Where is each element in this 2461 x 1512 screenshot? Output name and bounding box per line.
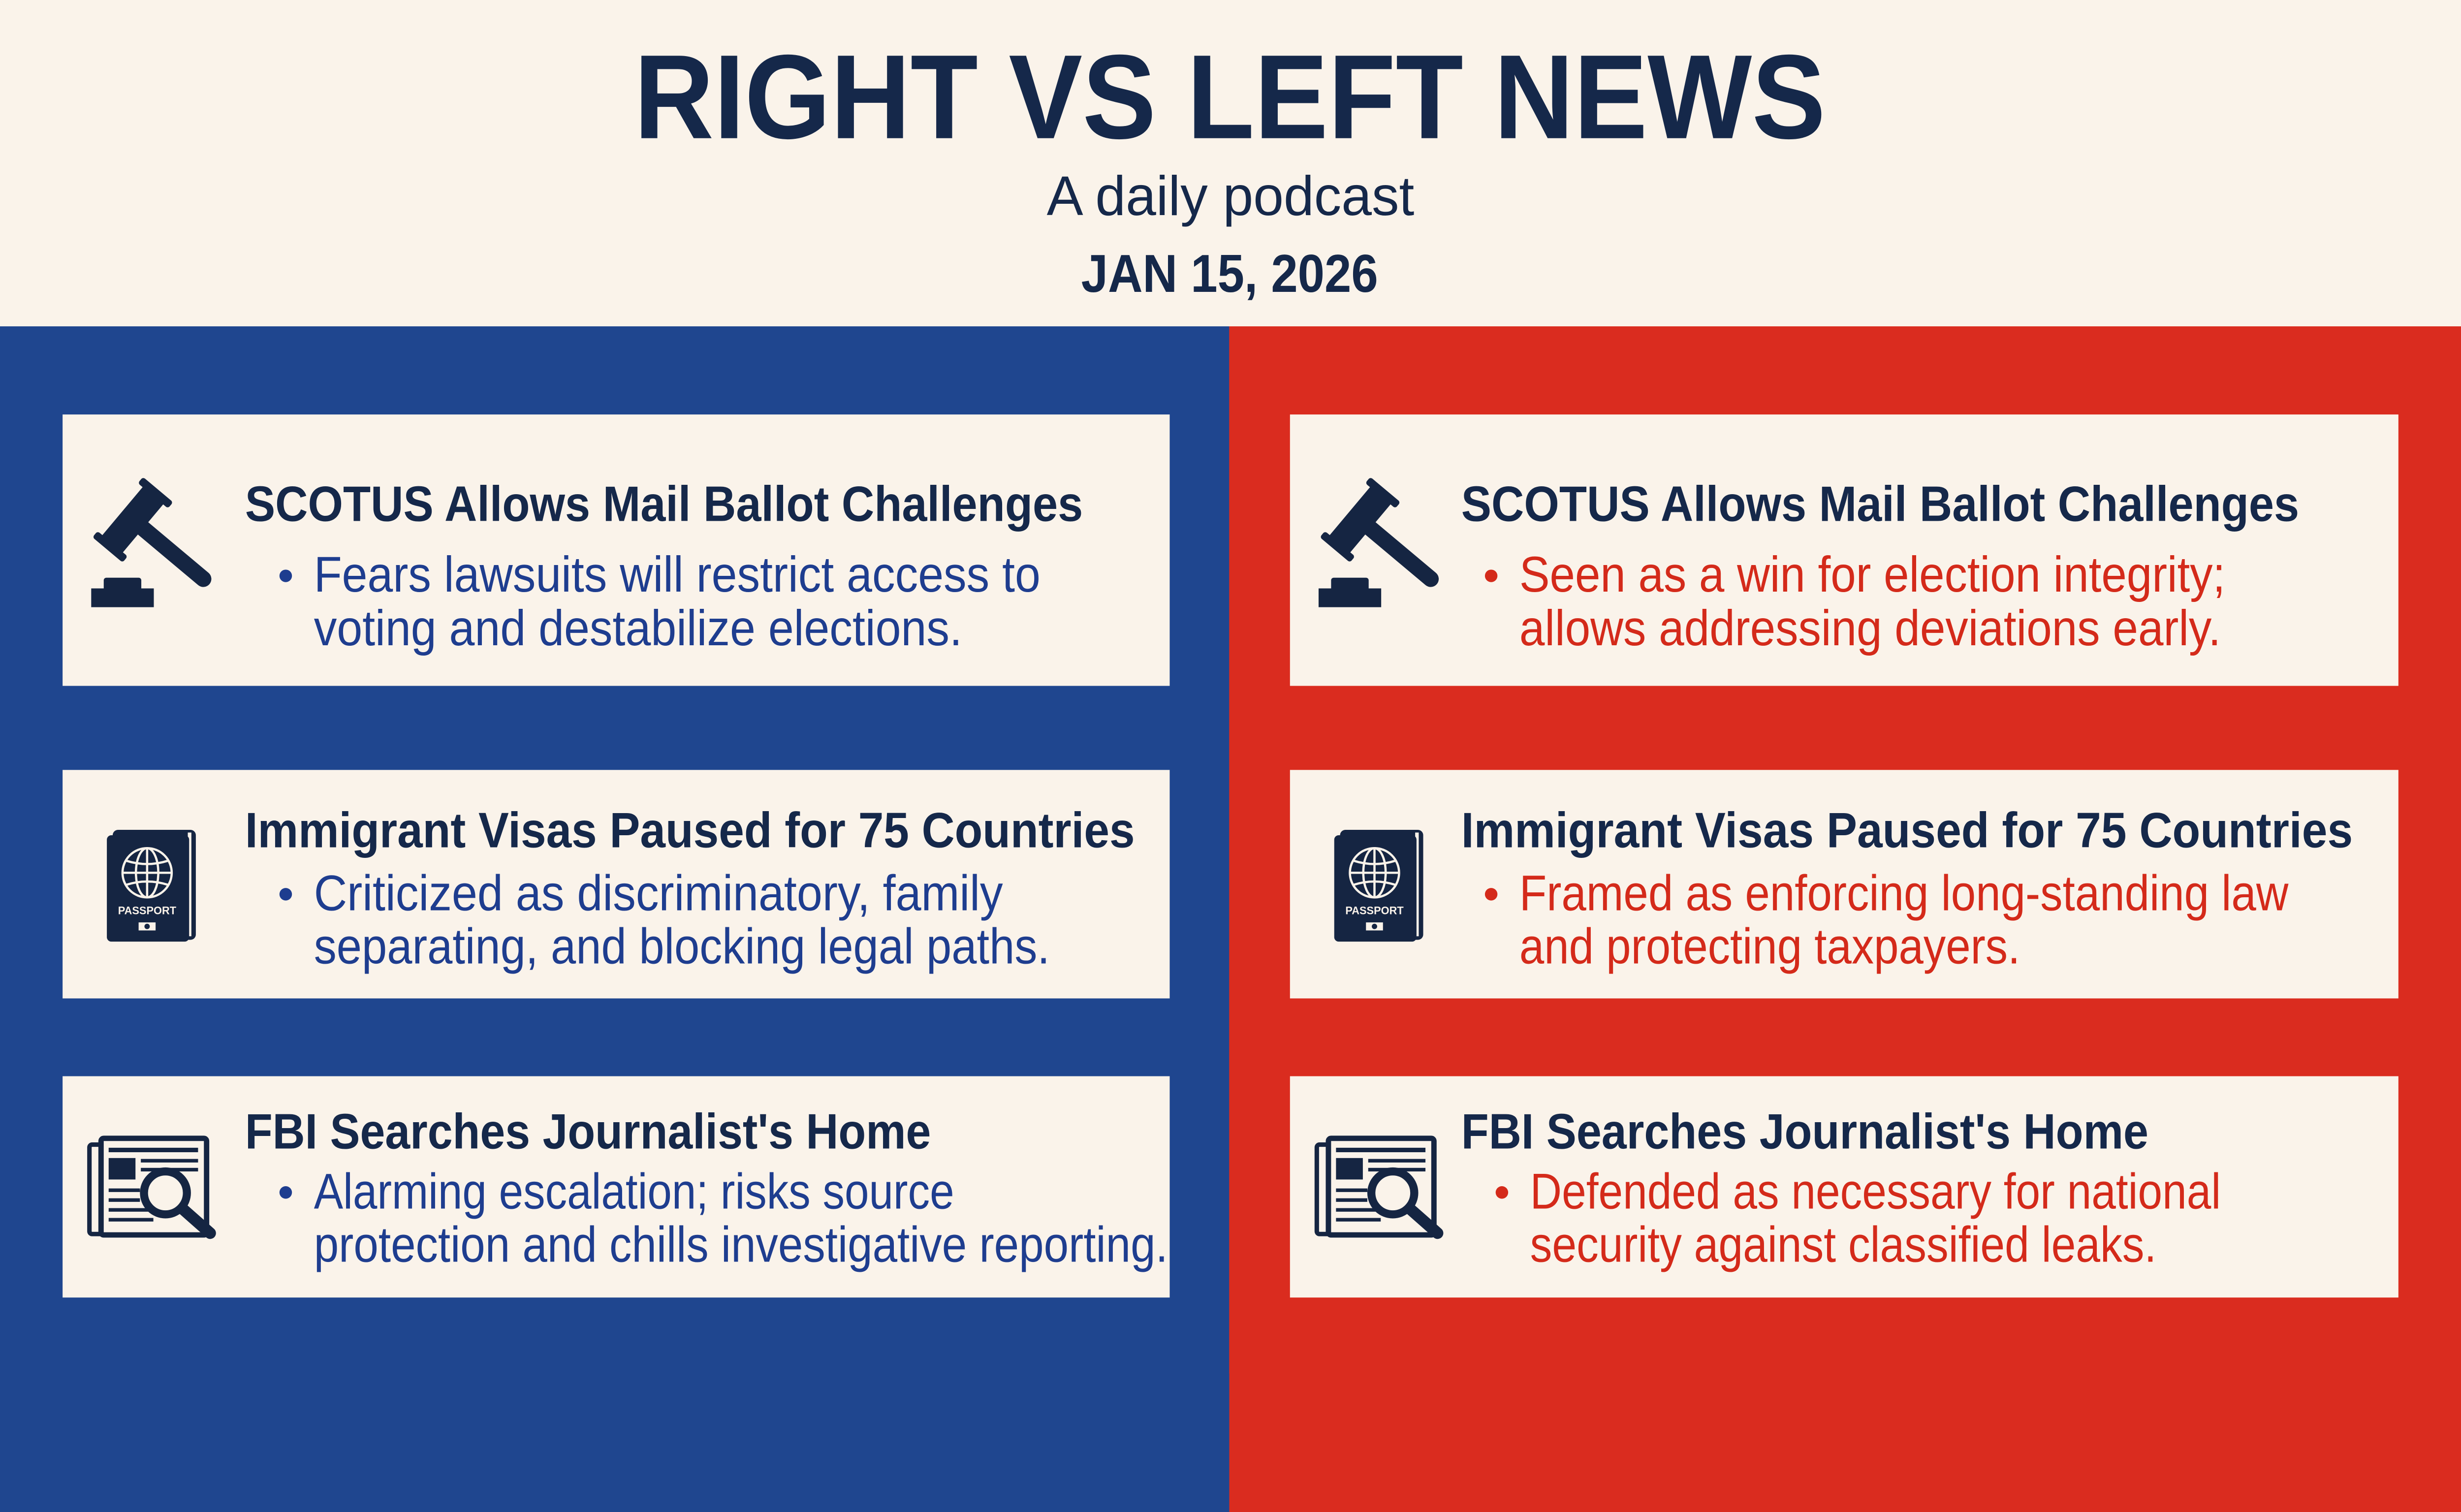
card: left FBI: Alarming escalation; risks source bbox=[314, 1163, 954, 1219]
card: left visas: Immigrant Visas Paused for 75 Countries bbox=[245, 803, 1135, 858]
icon: newspaper magnifier bbox=[90, 1138, 210, 1235]
card: left FBI: protection and chills investigative reporting. bbox=[314, 1217, 1168, 1273]
icon: gavel right bbox=[1319, 477, 1462, 614]
card: right visas: and protecting taxpayers. bbox=[1519, 918, 2020, 975]
card: right FBI: security against classified leaks. bbox=[1530, 1217, 2156, 1273]
card: right FBI bbox=[1290, 1076, 2398, 1297]
card: right SCOTUS bbox=[1290, 414, 2398, 686]
card: right visas: Framed as enforcing long-standing law bbox=[1519, 865, 2289, 921]
icon: newspaper magnifier right bbox=[1317, 1138, 1438, 1235]
icon: gavel bbox=[91, 477, 235, 614]
card: left FBI: FBI Searches Journalist's Home bbox=[245, 1104, 931, 1160]
card: right SCOTUS: allows addressing deviations early. bbox=[1519, 600, 2221, 656]
card: left SCOTUS: voting and destabilize elections. bbox=[314, 600, 962, 656]
card: right SCOTUS: Seen as a win for election integrity; bbox=[1519, 546, 2225, 602]
card: right visas: Immigrant Visas Paused for 75 Countries bbox=[1461, 803, 2353, 858]
icon: passport right bbox=[1334, 830, 1423, 942]
card: left SCOTUS: SCOTUS Allows Mail Ballot Challenges bbox=[245, 476, 1083, 532]
date: JAN 15, 2026 bbox=[1081, 244, 1378, 304]
header background bbox=[0, 0, 2461, 326]
card: left SCOTUS: Fears lawsuits will restrict access to bbox=[314, 546, 1041, 602]
title: RIGHT VS LEFT NEWS bbox=[634, 30, 1826, 164]
subtitle: A daily podcast bbox=[1047, 165, 1414, 227]
icon: passport bbox=[107, 830, 196, 942]
card: right FBI: Defended as necessary for national bbox=[1530, 1163, 2221, 1219]
card: left visas: Criticized as discriminatory, family bbox=[314, 865, 1003, 921]
card: right FBI: FBI Searches Journalist's Home bbox=[1461, 1104, 2148, 1160]
card: left SCOTUS bbox=[63, 414, 1169, 686]
card: left visas bbox=[63, 770, 1169, 999]
card: right SCOTUS: SCOTUS Allows Mail Ballot Challenges bbox=[1461, 476, 2299, 532]
panel: left (blue) bbox=[0, 326, 1229, 1374]
card: left visas: separating, and blocking legal paths. bbox=[314, 918, 1050, 975]
card: right visas bbox=[1290, 770, 2398, 999]
panel: right (red) bbox=[1229, 326, 2461, 1374]
card: left FBI bbox=[63, 1076, 1169, 1297]
